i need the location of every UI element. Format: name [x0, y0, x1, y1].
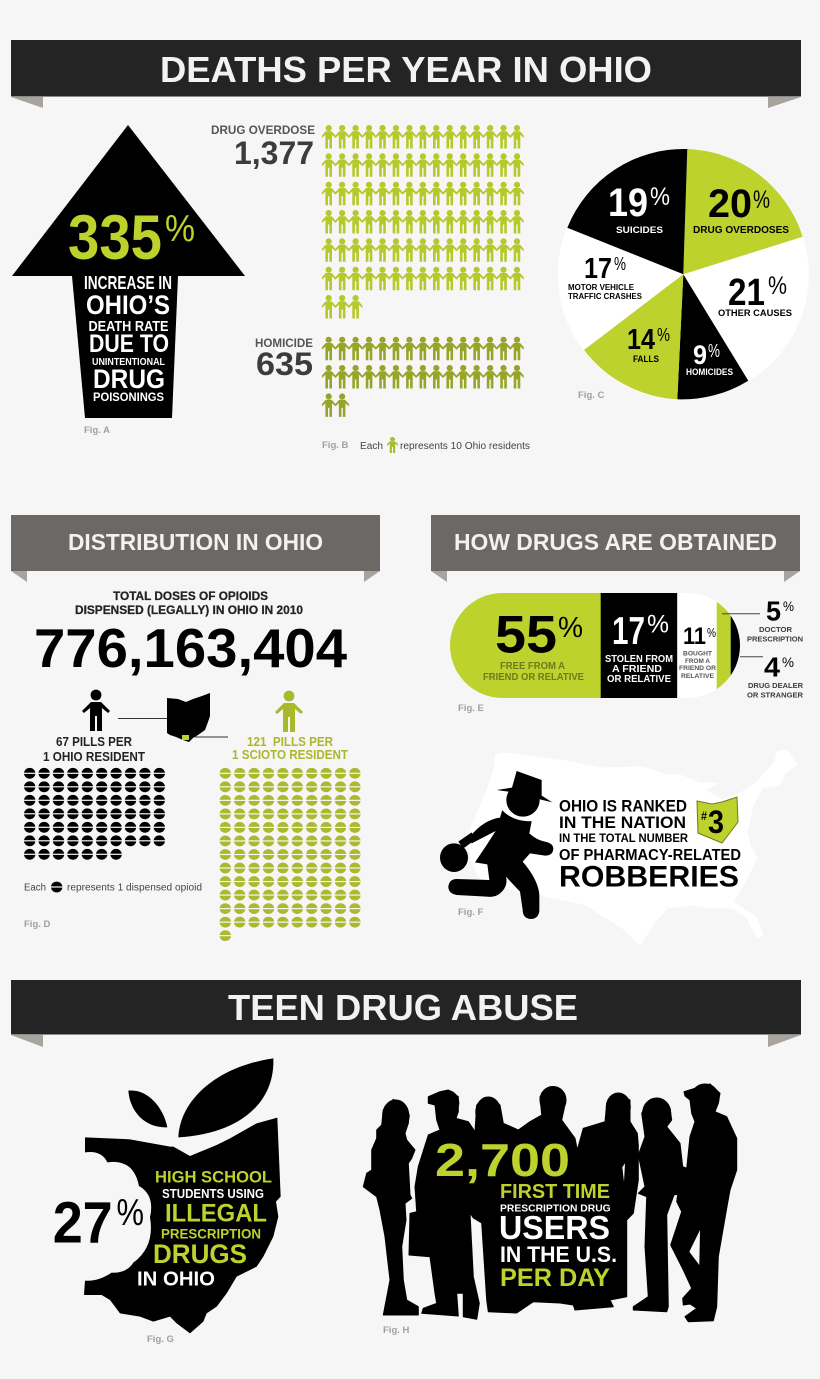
statistic: 2,700: 2,700	[435, 1134, 570, 1186]
label: motor vehicle traffic crashes: TRAFFIC CRASHES	[568, 292, 643, 301]
label: 121 pills: 1 SCIOTO RESIDENT	[232, 748, 348, 762]
panel: Fig. A arrow	[12, 125, 245, 418]
arrow text: DRUG	[93, 364, 165, 394]
pictogram: drug overdose people	[322, 125, 524, 318]
caption: Fig. E: Fig. E	[458, 703, 484, 714]
badge: Ohio number 3	[697, 797, 738, 843]
label: other causes: OTHER CAUSES	[718, 308, 792, 319]
label: suicides: SUICIDES	[616, 225, 663, 236]
label: 67 pills: 67 PILLS PER	[56, 735, 132, 749]
label: suicides: 19	[608, 181, 648, 225]
segment: 55% free from a friend or relative: 55	[495, 606, 557, 665]
label: homicide 635: 635	[256, 346, 313, 382]
label: homicides: 9	[693, 340, 707, 370]
arrow text: DUE TO	[89, 330, 169, 358]
caption: Fig. H: Fig. H	[383, 1325, 410, 1336]
callout: 5% doctor prescription: DOCTOR	[759, 625, 793, 634]
panel: Fig. D distribution	[24, 589, 361, 941]
banner: how drugs are obtained	[431, 515, 800, 582]
text: high school students: HIGH SCHOOL	[155, 1169, 272, 1187]
icon: running robber	[440, 771, 553, 919]
arrow text: POISONINGS	[93, 390, 164, 404]
label: drug overdoses: DRUG OVERDOSES	[693, 225, 789, 236]
legend: pills: Each	[24, 883, 46, 894]
legend: people: Each	[360, 441, 383, 452]
badge: Ohio number 3: 3	[708, 804, 724, 840]
panel: Fig. H teen silhouettes	[363, 1084, 737, 1336]
heading: total doses: DISPENSED (LEGALLY) IN OHIO IN 2010	[75, 603, 303, 617]
banner: deaths per year in Ohio	[11, 40, 801, 108]
callout: 4% drug dealer or stranger: DRUG DEALER	[748, 681, 804, 690]
segment: 55% free from a friend or relative: FRIEND OR RELATIVE	[483, 672, 584, 683]
label: homicides	[686, 340, 733, 377]
callout: 4% drug dealer or stranger	[740, 652, 804, 700]
text: high school students: ILLEGAL	[165, 1200, 267, 1228]
text: first time users: PRESCRIPTION DRUG	[500, 1203, 611, 1215]
text: ranked in the nation: OF PHARMACY-RELATED	[559, 847, 741, 864]
icon: green person	[275, 691, 303, 732]
statistic: 27 percent: %	[116, 1192, 144, 1233]
pictogram: black pills	[24, 768, 165, 860]
label: drug overdoses: 20	[708, 182, 752, 226]
slice: falls 14%	[584, 274, 683, 399]
label: falls	[627, 324, 670, 364]
label: drug overdose 1,377	[211, 123, 315, 171]
callout: 4% drug dealer or stranger: %	[782, 654, 794, 670]
segment: 11% bought from a friend or relative: 11	[683, 623, 706, 650]
label: motor vehicle traffic crashes: %	[614, 254, 626, 274]
label: other causes: 21	[728, 272, 765, 314]
segment: 17% stolen from a friend or relative	[605, 610, 673, 685]
caption: Fig. B: Fig. B	[322, 440, 349, 451]
legend: people: represents 10 Ohio residents	[400, 441, 530, 452]
legend: pills: represents 1 dispensed opioid	[67, 883, 202, 894]
label: drug overdoses	[693, 182, 789, 236]
label: homicides: HOMICIDES	[686, 367, 733, 377]
map: United States	[468, 750, 797, 945]
heading: total doses	[75, 589, 303, 617]
connector lines	[118, 718, 228, 737]
segment: 55% free from a friend or relative: FREE FROM A	[500, 661, 565, 672]
label: falls: %	[657, 325, 670, 345]
banner: distribution in Ohio	[11, 515, 380, 582]
segment: 11% bought from a friend or relative	[679, 623, 716, 680]
callout: 5% doctor prescription	[722, 596, 803, 644]
segment: 11% bought from a friend or relative: %	[707, 625, 716, 640]
label: 121 pills	[232, 735, 348, 762]
statistic: 27 percent: 27	[53, 1191, 113, 1256]
icon: Ohio-shaped apple with bite and leaves	[84, 1058, 281, 1333]
text: ranked in the nation: IN THE NATION	[559, 813, 686, 832]
text: first time users	[499, 1181, 617, 1292]
callout: 5% doctor prescription: 5	[766, 596, 781, 627]
slice: suicides 19%	[567, 149, 687, 274]
segment: 17% stolen from a friend or relative: STOLEN FROM	[605, 653, 673, 665]
segment: 17% stolen from a friend or relative: OR RELATIVE	[607, 673, 671, 685]
segment: 17% stolen from a friend or relative: %	[647, 611, 669, 639]
segment: 11% bought from a friend or relative: BOUGHT	[683, 650, 712, 657]
legend: pills	[24, 882, 202, 894]
text: ranked in the nation: ROBBERIES	[559, 861, 739, 894]
pictogram: homicide people	[322, 337, 524, 417]
text: ranked in the nation	[559, 798, 741, 894]
segment: 17% stolen from a friend or relative: A FRIEND	[612, 663, 662, 675]
label: falls: FALLS	[633, 354, 659, 364]
label: drug overdose 1,377: 1,377	[234, 135, 314, 171]
slice: drug overdoses 20%	[683, 149, 803, 274]
callout: 4% drug dealer or stranger: 4	[764, 652, 780, 683]
banner: distribution in Ohio: DISTRIBUTION IN OHIO	[68, 529, 323, 555]
text: high school students: STUDENTS USING	[162, 1187, 264, 1201]
caption: Fig. A: Fig. A	[84, 425, 110, 436]
panel: Fig. F robberies	[440, 750, 797, 945]
text: ranked in the nation: OHIO IS RANKED	[559, 798, 687, 816]
label: drug overdoses: %	[753, 186, 770, 214]
arrow text	[84, 273, 172, 404]
segment: 11% bought from a friend or relative: RELATIVE	[681, 673, 715, 680]
text: ranked in the nation: IN THE TOTAL NUMBER	[559, 831, 688, 845]
text: first time users: PER DAY	[500, 1264, 610, 1292]
label: suicides: %	[650, 183, 670, 211]
legend: people	[360, 437, 530, 453]
label: homicides: %	[708, 341, 720, 361]
text: first time users: FIRST TIME	[500, 1181, 610, 1203]
text: high school students: DRUGS	[153, 1239, 247, 1269]
arrow text: DEATH RATE	[88, 319, 169, 335]
panel: Fig. G Ohio apple	[53, 1058, 281, 1345]
text: first time users: USERS	[499, 1209, 610, 1246]
label: 67 pills: 1 OHIO RESIDENT	[43, 750, 145, 764]
label: homicide 635: HOMICIDE	[255, 336, 313, 350]
label: motor vehicle traffic crashes	[568, 253, 643, 301]
label: other causes: %	[768, 272, 787, 300]
text: high school students	[137, 1169, 272, 1291]
caption: Fig. C: Fig. C	[578, 390, 605, 401]
label: drug overdose 1,377: DRUG OVERDOSE	[211, 123, 315, 137]
caption: Fig. G: Fig. G	[147, 1334, 174, 1345]
caption: Fig. F: Fig. F	[458, 907, 484, 918]
statistic: 335 percent: %	[165, 208, 195, 250]
label: other causes	[718, 272, 792, 319]
heading: total doses: TOTAL DOSES OF OPIOIDS	[113, 589, 268, 603]
callout: 5% doctor prescription: %	[783, 598, 794, 614]
pictogram: green pills	[219, 768, 361, 941]
badge: Ohio number 3: #	[701, 809, 707, 823]
panel: Fig. E capsule chart	[450, 593, 804, 700]
banner: teen drug abuse: TEEN DRUG ABUSE	[228, 987, 578, 1028]
label: 121 pills: 121 PILLS PER	[247, 735, 333, 749]
banner: deaths per year in Ohio: DEATHS PER YEAR IN OHIO	[160, 49, 652, 90]
arrow text: OHIO’S	[86, 290, 170, 320]
segment: 11% bought from a friend or relative: FROM A	[685, 658, 710, 665]
text: high school students: PRESCRIPTION	[161, 1227, 261, 1242]
segment: 55% free from a friend or relative	[483, 606, 584, 683]
text: first time users: IN THE U.S.	[500, 1242, 617, 1267]
text: high school students: IN OHIO	[137, 1269, 215, 1291]
callout: 4% drug dealer or stranger: OR STRANGER	[747, 691, 804, 700]
banner: how drugs are obtained: HOW DRUGS ARE OBTAINED	[454, 529, 777, 555]
label: motor vehicle traffic crashes: MOTOR VEHICLE	[568, 283, 635, 292]
segment: 17% stolen from a friend or relative: 17	[612, 610, 645, 653]
icon: Ohio map with Scioto county	[167, 693, 210, 742]
label: suicides	[608, 181, 670, 236]
arrow text: UNINTENTIONAL	[92, 356, 165, 368]
big number: 776,163,404	[34, 617, 347, 679]
icon: black person	[82, 690, 110, 731]
callout: 5% doctor prescription: PRESCRIPTION	[747, 635, 803, 644]
banner: teen drug abuse	[11, 980, 801, 1047]
label: motor vehicle traffic crashes: 17	[584, 253, 612, 285]
icon: group of teens silhouette	[363, 1084, 737, 1322]
statistic: 335 percent: 335	[68, 203, 162, 273]
capsule segments	[450, 593, 741, 698]
segment: 11% bought from a friend or relative: FRIEND OR	[679, 665, 716, 672]
label: 67 pills	[43, 735, 145, 764]
slice: homicides 9%	[677, 274, 748, 399]
segment: 55% free from a friend or relative: %	[558, 612, 583, 644]
arrow text: INCREASE IN	[84, 273, 172, 293]
label: falls: 14	[627, 324, 655, 356]
panel: Fig. C pie chart	[558, 149, 809, 400]
panel: Fig. B pictogram	[211, 123, 530, 453]
caption: Fig. D: Fig. D	[24, 919, 51, 930]
